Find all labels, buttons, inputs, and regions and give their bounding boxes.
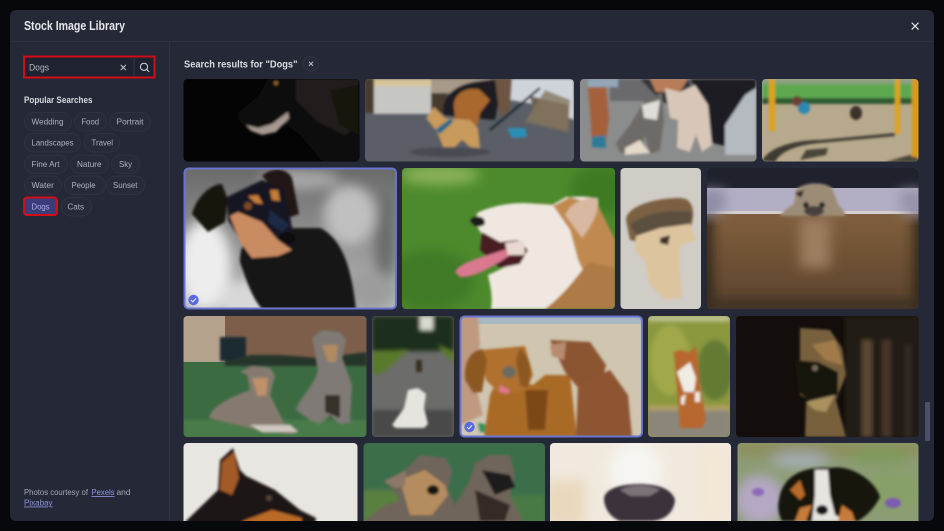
search tag chips: Portrait bbox=[116, 118, 144, 126]
photo credit: Photos courtesy of bbox=[24, 488, 89, 497]
search tag chips: Food bbox=[82, 118, 99, 126]
photo: black dog in the dark bbox=[183, 79, 360, 162]
search tag chips: Nature bbox=[77, 160, 102, 169]
photo: doberman profile on pale wall bbox=[184, 443, 358, 521]
search tag chips: Fine Art bbox=[32, 160, 60, 169]
photo credit: and bbox=[116, 488, 131, 497]
photo: sleeping puppies on a bed bbox=[620, 168, 702, 309]
photo credit: Pexels bbox=[92, 488, 114, 497]
photo: pug lying on wooden floor bbox=[707, 168, 918, 309]
photo: small white dog on a path bbox=[372, 316, 454, 438]
search tag chips: Travel bbox=[92, 138, 113, 148]
icon: close modal bbox=[912, 23, 918, 29]
icon: selected check bbox=[188, 295, 199, 305]
search tag chips: Sky bbox=[119, 160, 133, 169]
heading: search results: Search results for "Dogs" bbox=[184, 58, 298, 70]
panel: image results grid bbox=[179, 79, 930, 531]
photo: two schnauzers on a lawn bbox=[183, 316, 367, 438]
photo: husky dogs beside legs bbox=[580, 79, 757, 162]
search tag chips: Sunset bbox=[113, 181, 138, 190]
search box: Dogs bbox=[29, 62, 49, 72]
photo: corgi standing on its hind legs bbox=[648, 316, 733, 438]
panel: sidebar bbox=[24, 56, 154, 508]
search tag chips: Wedding bbox=[32, 118, 64, 126]
title: Stock Image Library bbox=[24, 18, 126, 33]
photo: schnauzer pair close-up bbox=[364, 443, 545, 521]
photo credit bbox=[24, 488, 131, 508]
photo: dogs on leashes on a street bbox=[365, 79, 574, 162]
photo: spaniel among purple flowers bbox=[738, 443, 918, 521]
photo: smiling corgi on green grass bbox=[402, 168, 615, 309]
photo credit: Pixabay bbox=[24, 498, 53, 508]
search box bbox=[24, 56, 154, 78]
icon: selected check bbox=[464, 422, 475, 432]
search tag chips: People bbox=[72, 181, 96, 190]
search tag chips: Water bbox=[32, 181, 54, 190]
scrollbar bbox=[925, 402, 930, 441]
photo: dogs on a playground swing bbox=[762, 79, 919, 162]
search tag chips: Cats bbox=[68, 202, 84, 212]
photo: selected dachshunds on a beach bbox=[460, 316, 643, 438]
search tag chips: Landscapes bbox=[32, 138, 74, 148]
active chip: dogs: Dogs bbox=[32, 202, 50, 212]
photo: selected doberman on grey background bbox=[179, 168, 397, 320]
heading: popular searches: Popular Searches bbox=[24, 95, 92, 105]
search tag chips bbox=[24, 112, 150, 216]
photo: dog nose close-up bbox=[550, 443, 731, 521]
photo: pug in dark room bbox=[736, 316, 919, 438]
